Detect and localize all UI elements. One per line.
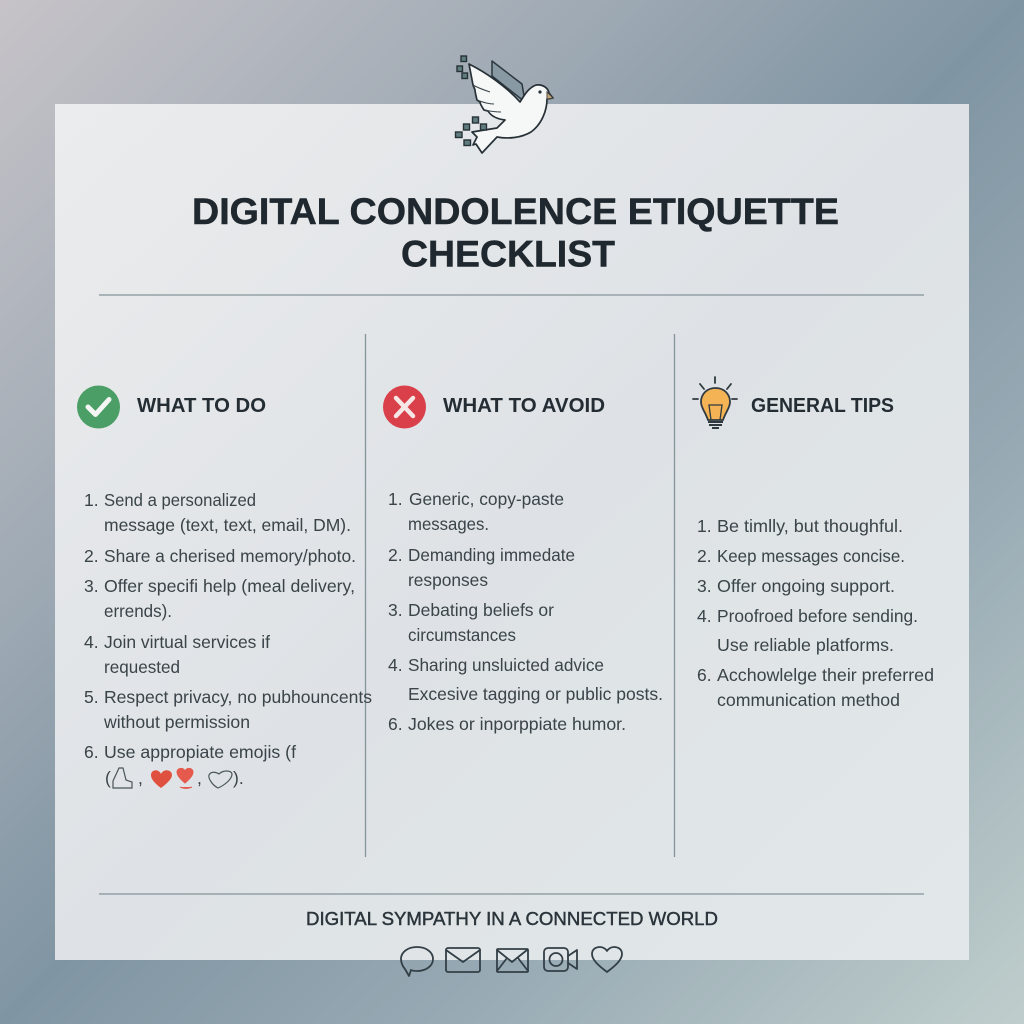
panel: what to do	[77, 386, 372, 788]
list: what to do: Send a personalized	[104, 490, 256, 510]
list: general tips: 4.	[697, 606, 712, 626]
icon: red heart emoji	[151, 770, 172, 788]
icon: video camera	[544, 948, 577, 971]
list: general tips: 3.	[697, 576, 712, 596]
list: what to do: errends).	[104, 601, 172, 621]
icon: green check	[77, 386, 120, 428]
list: general tips: 6.	[697, 665, 712, 685]
list: what to avoid: Excesive tagging or public posts.	[408, 684, 663, 704]
list: what to do: 3.	[84, 576, 99, 596]
list: general tips: Be timlly, but thoughful.	[717, 516, 903, 536]
icon: praying hands emoji	[113, 768, 132, 788]
list: what to avoid: Sharing unsluicted advice	[408, 655, 604, 675]
heading: what to avoid: WHAT TO AVOID	[443, 394, 605, 417]
icon: envelope	[446, 948, 480, 972]
list: general tips	[697, 516, 934, 710]
list: what to do: ,	[138, 768, 143, 788]
list: what to do: message (text, text, email, DM).	[104, 515, 351, 535]
icon: envelope with folds	[497, 949, 528, 972]
icon: heart	[592, 947, 622, 972]
icon: red cross	[383, 386, 426, 428]
list: general tips: Keep messages concise.	[717, 546, 905, 566]
panel: general tips	[693, 377, 934, 710]
list: what to do: (	[105, 768, 111, 788]
list: what to do: 4.	[84, 632, 99, 652]
panel: what to avoid	[383, 386, 663, 734]
footer tagline: DIGITAL SYMPATHY IN A CONNECTED WORLD	[306, 908, 718, 929]
heading: what to do: WHAT TO DO	[137, 394, 266, 417]
list: what to do: ,	[197, 768, 202, 788]
list: general tips: Proofroed before sending.	[717, 606, 918, 626]
icon: speech bubble	[401, 947, 433, 976]
list: general tips: Use reliable platforms.	[717, 635, 894, 655]
list: what to do: 1.	[84, 490, 99, 510]
icon: outline heart emoji	[209, 771, 232, 788]
footer icons	[401, 947, 622, 976]
icon: light bulb	[693, 377, 737, 428]
title	[192, 190, 839, 274]
list: general tips: 1.	[697, 516, 712, 536]
list: what to do: Offer specifi help (meal delivery,	[104, 576, 355, 596]
list: general tips: communication method	[717, 690, 900, 710]
list: what to do: Respect privacy, no pubhouncents	[104, 687, 372, 707]
icon: dove with pixels	[456, 56, 553, 153]
list: what to avoid: messages.	[408, 514, 489, 534]
list: what to avoid: Generic, copy-paste	[409, 489, 564, 509]
heading: general tips: GENERAL TIPS	[751, 394, 894, 417]
list: what to do: 2.	[84, 546, 99, 566]
list: what to avoid: 6.	[388, 714, 403, 734]
list: general tips: Offer ongoing support.	[717, 576, 895, 596]
list: what to do: Share a cherised memory/photo.	[104, 546, 356, 566]
title: DIGITAL CONDOLENCE ETIQUETTE	[192, 190, 839, 232]
list: general tips: 2.	[697, 546, 712, 566]
list: what to avoid: 3.	[388, 600, 403, 620]
list: what to avoid: 1.	[388, 489, 403, 509]
list: what to avoid: 4.	[388, 655, 403, 675]
list: what to avoid: Demanding immedate	[408, 545, 575, 565]
title: CHECKLIST	[401, 232, 615, 274]
list: what to do: ).	[233, 768, 244, 788]
list: what to avoid: responses	[408, 570, 488, 590]
list: what to do: without permission	[103, 712, 250, 732]
list: what to avoid: 2.	[388, 545, 403, 565]
list: what to do: 5.	[84, 687, 99, 707]
list: what to avoid: Debating beliefs or	[408, 600, 554, 620]
list: what to do: requested	[104, 657, 180, 677]
list: what to do: 6.	[84, 742, 99, 762]
list: what to do	[84, 490, 372, 788]
list: what to do: Use appropiate emojis (f	[104, 742, 296, 762]
list: what to avoid	[388, 489, 663, 734]
list: what to avoid: circumstances	[408, 625, 516, 645]
list: general tips: Acchowlelge their preferred	[717, 665, 934, 685]
list: what to avoid: Jokes or inporppiate humor.	[408, 714, 626, 734]
icon: red heart on stand emoji	[177, 768, 193, 788]
panel: main card	[55, 104, 969, 960]
list: what to do: Join virtual services if	[104, 632, 270, 652]
